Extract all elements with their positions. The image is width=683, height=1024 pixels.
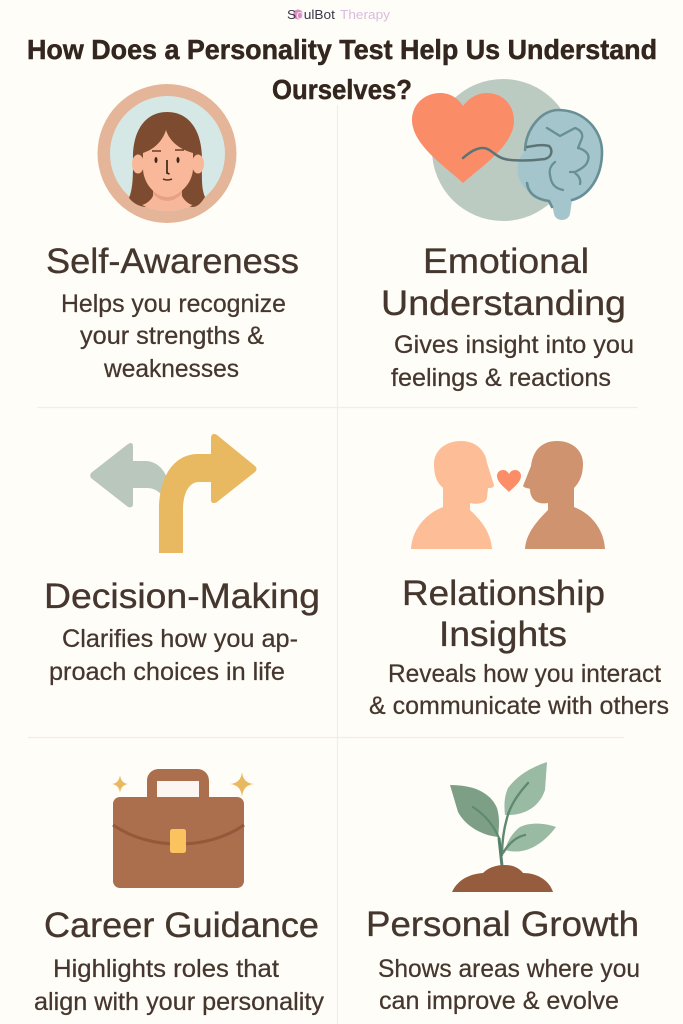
text block: Reveals how you interact <box>388 660 661 688</box>
text block: proach choices in life <box>49 658 285 686</box>
heading <box>381 242 626 323</box>
heading: Self-Awareness <box>46 242 299 281</box>
heading: Decision-Making <box>44 577 320 616</box>
panel: career guidance <box>34 769 324 1016</box>
logo: SoulBot Therapy: Therapy <box>340 7 391 22</box>
panel: personal growth <box>366 762 640 1015</box>
icon: mirror portrait <box>98 84 236 225</box>
text block <box>378 955 640 1015</box>
heading <box>402 574 605 654</box>
text block <box>61 290 286 383</box>
title <box>27 34 657 105</box>
text block: Gives insight into you <box>394 331 634 359</box>
icon: sprout <box>450 762 556 892</box>
panel: emotional understanding <box>381 79 634 392</box>
heading: Career Guidance <box>44 906 319 945</box>
icon: two people and heart <box>411 441 605 549</box>
title: Ourselves? <box>272 74 412 105</box>
text block <box>391 331 634 392</box>
text block: Clarifies how you ap- <box>62 625 298 653</box>
text block: Helps you recognize <box>61 290 286 318</box>
icon: forking arrows <box>90 434 256 553</box>
heading: Understanding <box>381 284 626 323</box>
text block: weaknesses <box>103 355 239 383</box>
text block: align with your personality <box>34 988 324 1016</box>
text block: & communicate with others <box>369 692 669 720</box>
text block: Highlights roles that <box>53 955 279 983</box>
text block: Shows areas where you <box>378 955 640 983</box>
panel: relationship insights <box>369 441 669 720</box>
text block: your strengths & <box>80 322 264 350</box>
logo: SoulBot Therapy <box>287 7 391 22</box>
panel: self-awareness <box>46 84 299 383</box>
icon: briefcase <box>112 769 254 888</box>
text block <box>369 660 669 720</box>
text block <box>34 955 324 1016</box>
heading: Insights <box>439 615 567 654</box>
heading: Personal Growth <box>366 905 639 944</box>
panel: decision-making <box>44 434 320 686</box>
logo: SoulBot Therapy: SoulBot <box>287 7 335 22</box>
title: How Does a Personality Test Help Us Understand <box>27 34 657 65</box>
text block: feelings & reactions <box>391 364 611 392</box>
text block <box>49 625 298 686</box>
heading: Emotional <box>423 242 589 281</box>
heading: Relationship <box>402 574 605 613</box>
text block: can improve & evolve <box>379 987 619 1015</box>
icon: heart and brain <box>412 79 602 221</box>
